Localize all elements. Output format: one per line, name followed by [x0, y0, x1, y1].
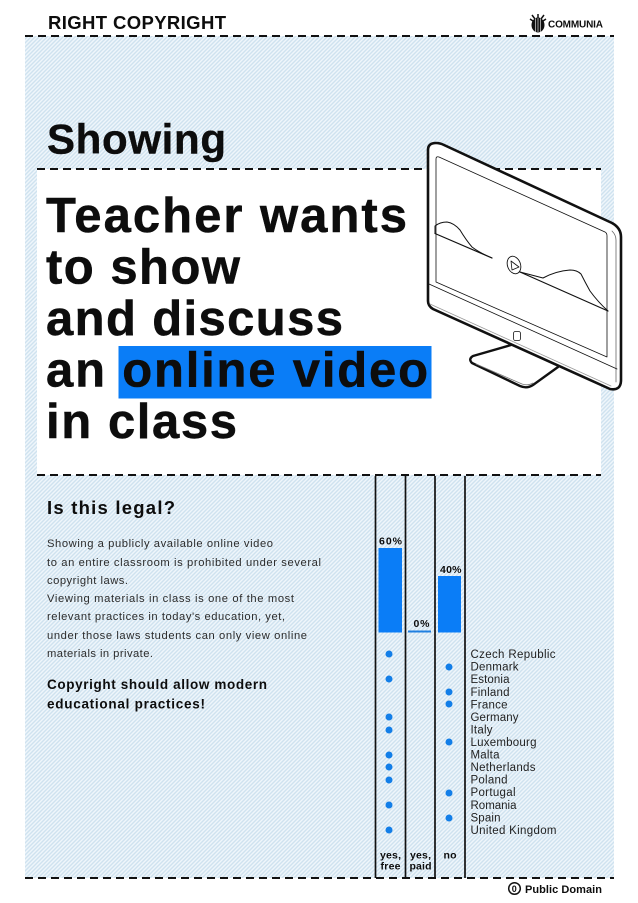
- white title panel: [37, 169, 601, 475]
- country list: Denmark: [470, 662, 519, 674]
- main title: to show: [46, 240, 241, 294]
- country list: Czech Republic: [470, 649, 556, 661]
- screen: [436, 157, 607, 357]
- column rules: [376, 476, 465, 878]
- dots: country answers: [386, 650, 452, 834]
- category heading: Showing: Showing: [47, 116, 226, 162]
- country list: France: [470, 700, 508, 712]
- body text: relevant practices in today's education, yet,: [47, 611, 285, 623]
- main title: and discuss: [46, 292, 343, 346]
- country list: Poland: [470, 774, 508, 786]
- body text: materials in private.: [47, 648, 153, 660]
- column labels: free: [380, 860, 401, 872]
- country list: Finland: [470, 687, 510, 699]
- main title: an online video: [46, 344, 428, 398]
- main title: [46, 189, 432, 449]
- column labels: paid: [410, 860, 432, 872]
- logo: COMMUNIA: [530, 14, 603, 32]
- country list: Portugal: [470, 787, 516, 799]
- callout: Copyright should allow: Copyright should allow modern: [47, 677, 267, 692]
- public domain mark: 0: [512, 884, 517, 894]
- main title: Teacher wants: [46, 189, 407, 243]
- heading: Is this legal?: Is this legal?: [47, 497, 175, 518]
- country list: Italy: [470, 724, 493, 736]
- callout: Copyright should allow: educational practices!: [47, 696, 205, 712]
- play button: [505, 254, 523, 276]
- body text: under those laws students can only view online: [47, 630, 307, 642]
- monitor stand: [470, 345, 558, 387]
- logo: COMMUNIA: COMMUNIA: [548, 20, 603, 30]
- callout: Copyright should allow: [47, 677, 267, 712]
- body text: [47, 538, 321, 660]
- bar: yes, free 60%: 60%: [379, 536, 403, 548]
- public domain mark: Public Domain: [525, 884, 602, 896]
- country list: Spain: [470, 812, 500, 824]
- icon: computer monitor with video: [428, 143, 621, 389]
- body text: copyright laws.: [47, 575, 128, 587]
- monitor body: [428, 143, 621, 389]
- body text: Viewing materials in class is one of the most: [47, 593, 295, 605]
- column labels: no: [444, 850, 456, 862]
- bar chart: [378, 536, 462, 632]
- header: RIGHT COPYRIGHT: RIGHT COPYRIGHT: [48, 12, 227, 33]
- country list: Malta: [470, 750, 500, 762]
- column labels: [380, 850, 456, 872]
- bar: no 40%: 40%: [440, 564, 462, 576]
- column labels: yes,: [380, 850, 401, 862]
- body text: to an entire classroom is prohibited under several: [47, 557, 321, 569]
- country list: [470, 649, 556, 837]
- bar: yes, paid 0%: 0%: [414, 618, 430, 630]
- country list: United Kingdom: [470, 825, 556, 837]
- highlight behind online video: [118, 346, 432, 398]
- country list: Netherlands: [470, 762, 536, 774]
- country list: Germany: [470, 712, 519, 724]
- body text: Showing a publicly available online video: [47, 538, 273, 550]
- country list: Luxembourg: [470, 737, 536, 749]
- column labels: yes,: [410, 850, 431, 862]
- video track and waveform: [435, 234, 492, 258]
- home button: [514, 332, 520, 340]
- country list: Estonia: [470, 674, 510, 686]
- main title: in class: [46, 395, 237, 449]
- country list: Romania: [470, 800, 517, 812]
